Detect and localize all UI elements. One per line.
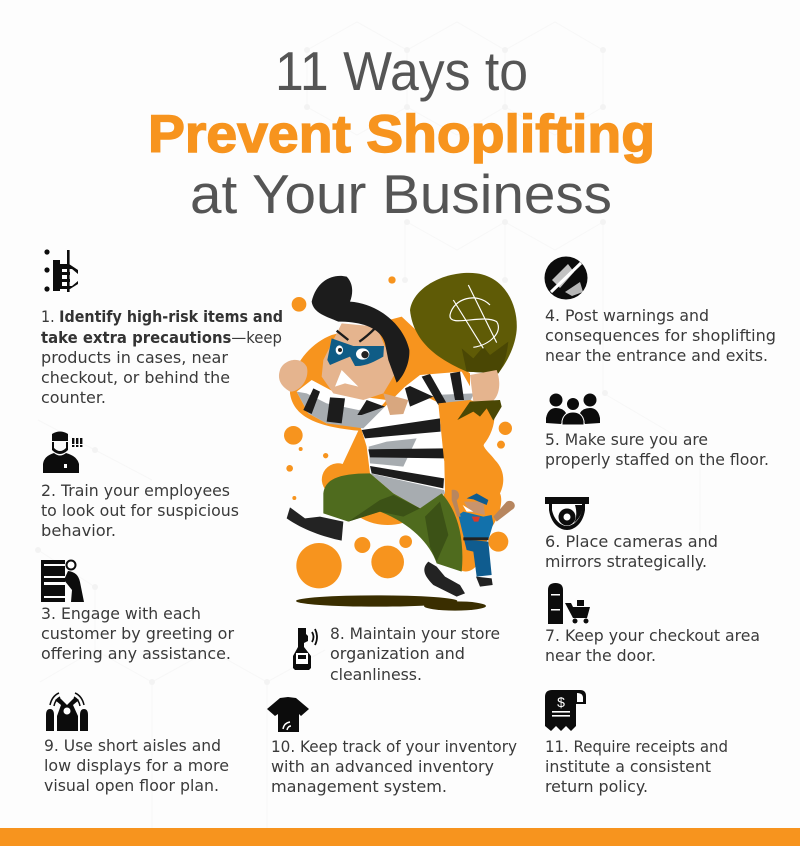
icon: receipt: $ <box>557 694 565 710</box>
ground shadow <box>296 595 486 611</box>
text: tip 4: near the entrance and exits. <box>545 347 768 365</box>
text: tip 10 <box>271 738 517 796</box>
text: tip 2 <box>41 482 239 540</box>
icon: security employee <box>43 432 82 473</box>
small police officer <box>452 490 515 587</box>
text: tip 8: 8. Maintain your store <box>330 625 500 643</box>
text: tip 5 <box>545 431 769 469</box>
text: tip 7: 7. Keep your checkout area <box>545 627 760 645</box>
title <box>148 40 655 225</box>
text: tip 6 <box>545 533 718 571</box>
text: tip 3 <box>41 605 235 663</box>
text: tip 11: return policy. <box>545 778 648 796</box>
icon: cleaning spray bottle <box>293 628 317 670</box>
text: tip 11: institute a consistent <box>545 758 711 776</box>
money bag <box>410 273 517 373</box>
text: tip 3: 3. Engage with each <box>41 605 201 623</box>
text: tip 8 <box>330 625 500 684</box>
title: at Your Business <box>190 163 612 225</box>
head <box>312 276 409 415</box>
text: tip 1: 1. Identify high-risk items and <box>41 308 283 326</box>
text: tip 10: 10. Keep track of your inventory <box>271 738 517 756</box>
orange paint splash <box>284 276 512 588</box>
text: tip 8: organization and <box>330 645 465 663</box>
title: 11 Ways to <box>275 40 528 102</box>
text: tip 7: near the door. <box>545 647 656 665</box>
text: tip 6: 6. Place cameras and <box>545 533 718 551</box>
text: tip 10: management system. <box>271 778 447 796</box>
text: tip 5: 5. Make sure you are <box>545 431 708 449</box>
text: tip 7 <box>545 627 760 665</box>
text: tip 8: cleanliness. <box>330 666 422 684</box>
icon: tagged shirt <box>267 697 309 732</box>
text: tip 3: customer by greeting or <box>41 625 235 643</box>
text: tip 6: mirrors strategically. <box>545 553 707 571</box>
text: tip 1 <box>41 308 283 407</box>
striped shirt <box>297 372 474 508</box>
icon: receipt <box>545 690 586 731</box>
green trousers <box>323 473 462 572</box>
text: tip 9: low displays for a more <box>44 757 229 775</box>
icon: checkout door sensor and cart <box>548 583 590 624</box>
icon: no shoplifting sign <box>544 256 588 300</box>
text: tip 4: 4. Post warnings and <box>545 307 709 325</box>
text: tip 11: 11. Require receipts and <box>545 738 728 756</box>
shoes <box>287 507 465 597</box>
icon: high-risk item in case <box>44 249 78 292</box>
text: tip 4: consequences for shoplifting <box>545 327 776 345</box>
text: tip 11 <box>545 738 728 796</box>
text: tip 9: visual open floor plan. <box>44 777 219 795</box>
fists <box>279 360 502 421</box>
text: tip 10: with an advanced inventory <box>271 758 494 776</box>
icon: group of staff <box>546 394 600 425</box>
icon: open floor plan shoppers <box>46 693 88 731</box>
text: tip 2: to look out for suspicious <box>41 502 239 520</box>
text: tip 5: properly staffed on the floor. <box>545 451 769 469</box>
text: tip 4 <box>545 307 776 365</box>
text: tip 2: 2. Train your employees <box>41 482 230 500</box>
text: tip 1: take extra precautions—keep <box>41 329 282 347</box>
text: tip 9 <box>44 737 229 795</box>
text: tip 1: counter. <box>41 389 106 407</box>
text: tip 2: behavior. <box>41 522 116 540</box>
footer bar <box>0 828 800 846</box>
text: tip 1: products in cases, near <box>41 349 229 367</box>
text: tip 9: 9. Use short aisles and <box>44 737 221 755</box>
icon: security camera <box>545 497 589 530</box>
text: tip 3: offering any assistance. <box>41 645 231 663</box>
title: Prevent Shoplifting <box>148 105 655 164</box>
icon: employee greeting at shelf <box>41 560 84 602</box>
orange shoulder overlap <box>438 400 493 473</box>
text: tip 1: checkout, or behind the <box>41 369 230 387</box>
illustration: thief running with money bag <box>279 273 517 611</box>
